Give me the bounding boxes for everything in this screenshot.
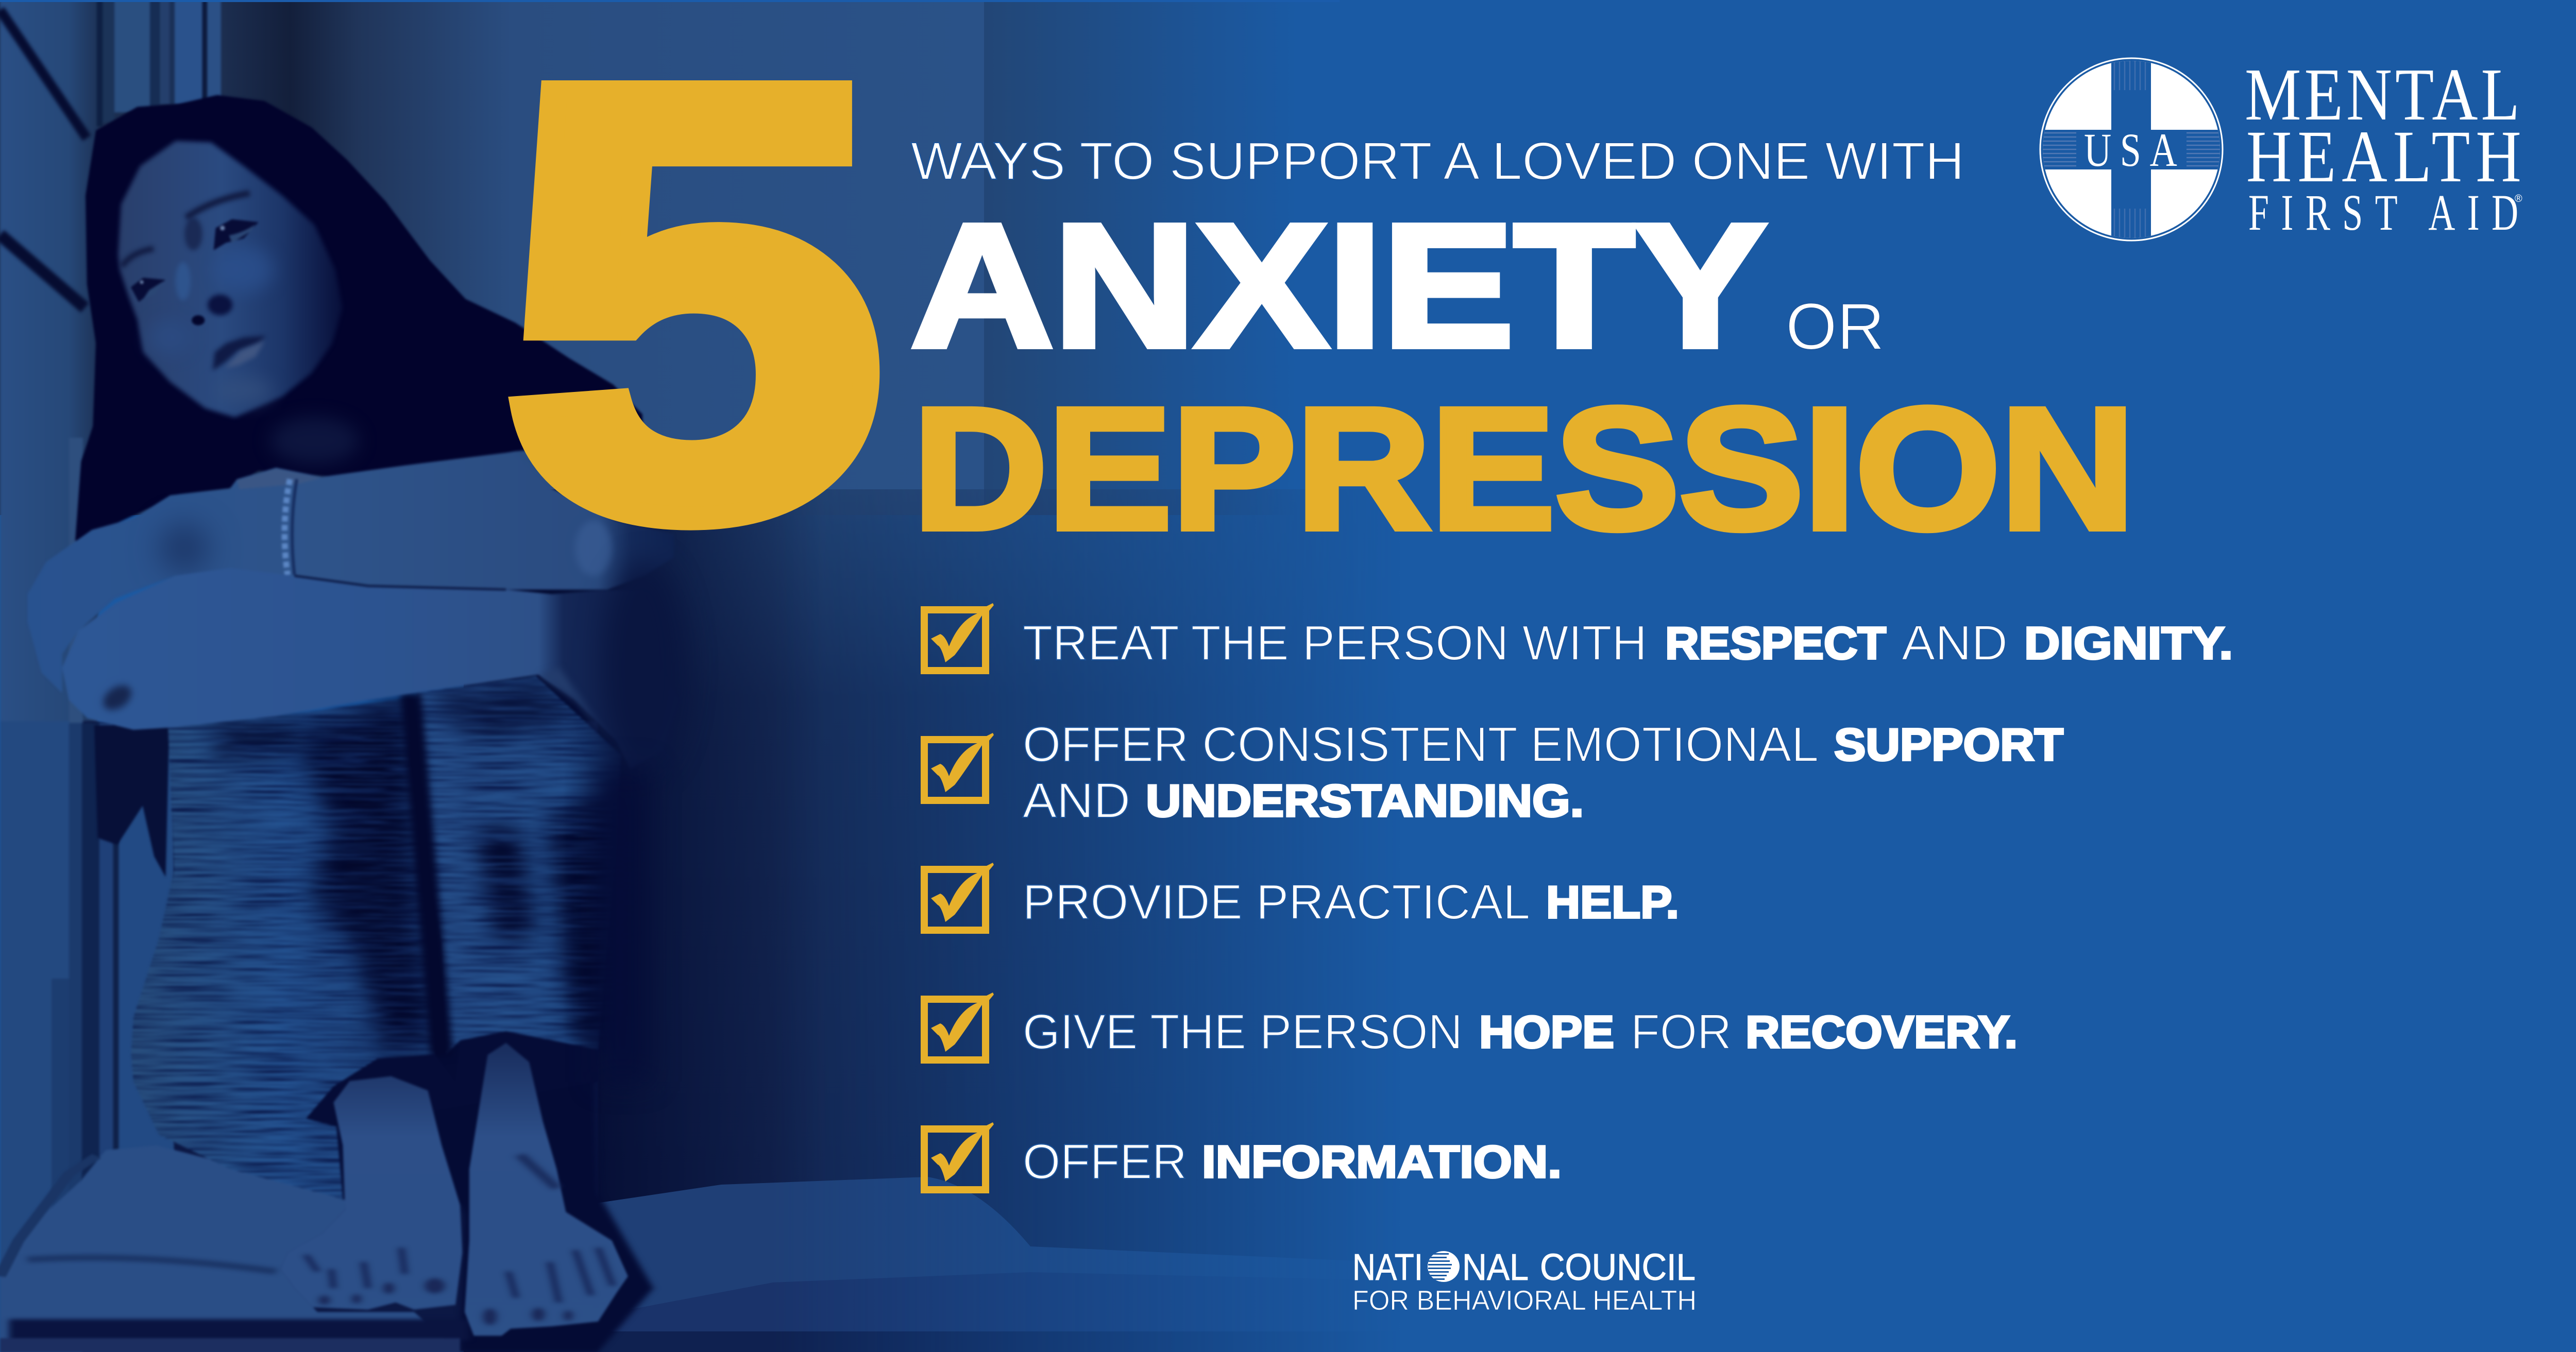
left foot <box>281 1076 462 1310</box>
item 4: FOR <box>1631 1004 1732 1059</box>
upper arm with sleeve <box>28 452 674 693</box>
item 5 <box>924 1122 1562 1190</box>
item 3: HELP. <box>1546 877 1679 928</box>
item 4 <box>924 992 2018 1060</box>
heading: or: OR <box>1786 290 1885 364</box>
leg edge shadow <box>598 769 649 1082</box>
item 1: DIGNITY. <box>2024 618 2233 669</box>
top edge strip <box>0 0 1340 2</box>
item 2: UNDERSTANDING. <box>1146 775 1584 826</box>
registered mark: ® <box>2515 193 2522 204</box>
item 4: GIVE THE PERSON <box>1023 1004 1463 1059</box>
checkbox 4 <box>924 992 994 1060</box>
logo: National Council for Behavioral Health <box>1355 1251 1695 1310</box>
item 1: RESPECT <box>1665 618 1886 669</box>
feet shadow <box>295 1040 653 1352</box>
globe icon <box>1428 1251 1460 1282</box>
checklist <box>924 603 2233 1190</box>
logo wordmark first aid: FIRST AID <box>2248 183 2518 241</box>
heading: depression: DEPRESSION <box>913 372 2135 566</box>
nose <box>208 295 232 315</box>
item 2 <box>924 717 2063 828</box>
logo emblem <box>2035 52 2231 247</box>
item 2: SUPPORT <box>1834 719 2063 770</box>
item 4: HOPE <box>1479 1006 1614 1057</box>
item 2: AND <box>1023 773 1130 828</box>
logo: National Council for Behavioral Health: FOR BEHAVIORAL HEALTH <box>1352 1285 1697 1316</box>
item 5: OFFER <box>1023 1134 1187 1189</box>
item 5: INFORMATION. <box>1202 1136 1562 1187</box>
hair strand below arm <box>94 725 170 877</box>
window bars (top) <box>0 0 221 307</box>
heading: anxiety: ANXIETY <box>911 188 1766 384</box>
logo: National Council for Behavioral Health: NATI <box>1352 1247 1423 1288</box>
checkbox 1 <box>924 603 994 671</box>
hand shadow <box>603 562 686 774</box>
right foot <box>465 1043 628 1336</box>
brows <box>186 193 250 218</box>
logo: National Council for Behavioral Health: NAL <box>1462 1247 1529 1288</box>
photo: woman on window seat <box>0 95 686 1352</box>
photo: window <box>0 0 598 1352</box>
trousers <box>131 676 621 1199</box>
bracelet <box>284 479 290 575</box>
item 1 <box>924 603 2233 671</box>
logo wordmark mental: MENTAL <box>2245 54 2520 136</box>
left seat cushion <box>0 1145 469 1352</box>
neck <box>270 417 359 465</box>
item 1: TREAT THE PERSON WITH <box>1023 615 1647 671</box>
item 1: AND <box>1902 615 2008 671</box>
hair and dark shirt <box>75 95 643 541</box>
window sill and curtain (lower) <box>69 438 174 1229</box>
checkbox 2 <box>924 733 994 800</box>
logo USA: USA <box>2084 124 2177 177</box>
item 3: PROVIDE PRACTICAL <box>1023 875 1530 930</box>
logo: National Council for Behavioral Health: COUNCIL <box>1540 1247 1696 1288</box>
heading: ways to support: WAYS TO SUPPORT A LOVED ONE WITH <box>911 131 1964 191</box>
face <box>118 141 343 417</box>
checkbox 3 <box>924 863 994 930</box>
photo: room background <box>0 2 1345 1352</box>
item 3 <box>924 863 1679 930</box>
lips <box>213 336 266 370</box>
lower arm and hand <box>62 562 686 1082</box>
item 2: OFFER CONSISTENT EMOTIONAL <box>1023 717 1819 772</box>
logo: Mental Health First Aid <box>2035 52 2522 247</box>
eyes <box>214 219 259 250</box>
checkbox 5 <box>924 1122 994 1190</box>
logo wordmark health: HEALTH <box>2246 115 2521 197</box>
item 4: RECOVERY. <box>1745 1006 2018 1057</box>
